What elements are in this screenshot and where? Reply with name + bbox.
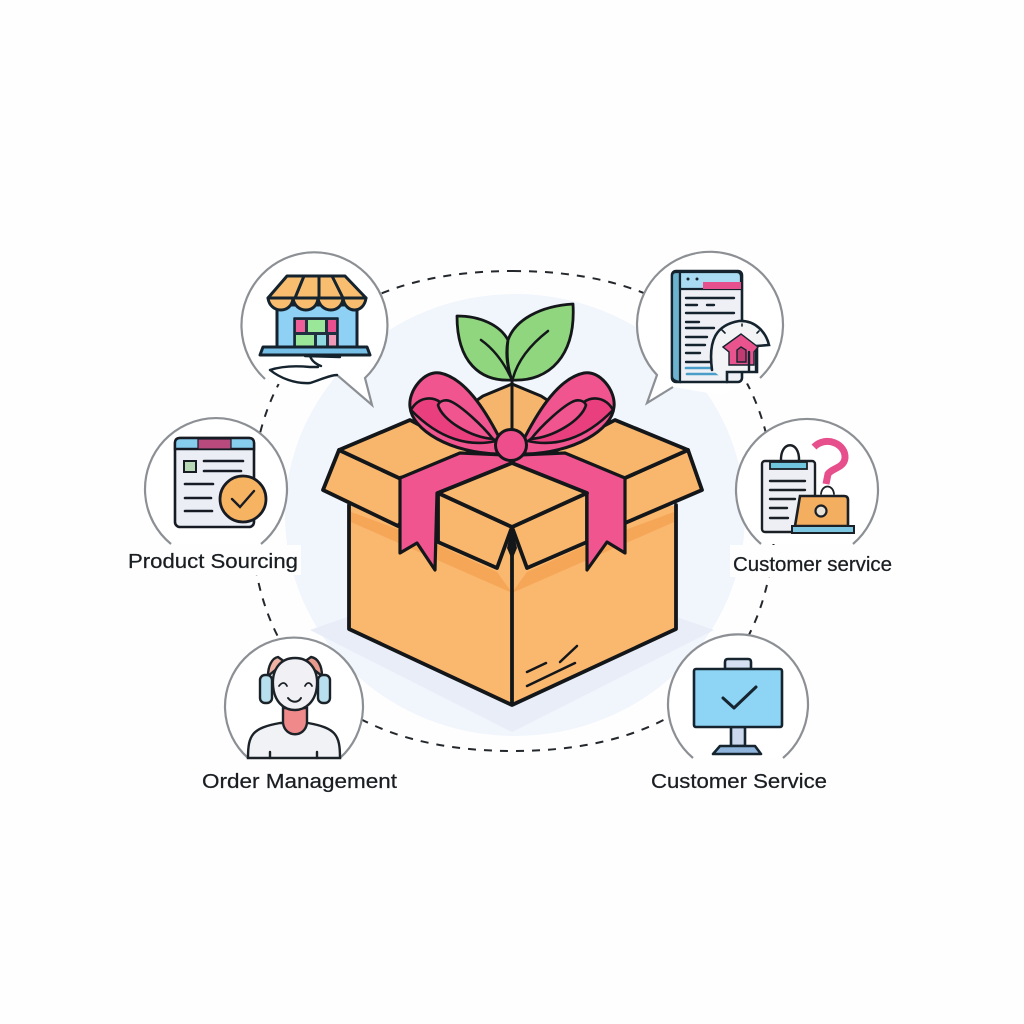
head — [273, 658, 317, 710]
central gift box — [323, 304, 702, 705]
window panes — [296, 320, 336, 346]
label mask right — [730, 545, 895, 577]
clipboard handle — [781, 445, 799, 461]
loop inner — [411, 398, 496, 443]
document body — [175, 438, 254, 527]
check mark — [232, 491, 254, 507]
bubble fill and stroke — [145, 418, 287, 544]
screen — [694, 669, 782, 727]
text lines — [686, 298, 734, 362]
icon: document — [672, 271, 769, 382]
check badge — [220, 476, 266, 522]
earphone right — [318, 675, 330, 703]
bubble: customer service clipboard — [733, 419, 892, 576]
top tab — [725, 659, 751, 669]
awning top — [268, 276, 366, 298]
header dots — [686, 278, 690, 280]
loop slit — [438, 400, 493, 439]
page — [672, 271, 742, 382]
thumbnail — [184, 461, 196, 472]
center seam tip — [507, 527, 517, 560]
base shelf — [260, 347, 370, 355]
icon: monitor with check — [694, 659, 782, 754]
left open flap — [323, 450, 420, 526]
front right flap — [512, 493, 587, 568]
loop outer — [525, 373, 614, 454]
smile — [288, 698, 301, 702]
stand — [731, 727, 745, 746]
text lines — [185, 461, 243, 511]
icon: clipboard and laptop — [762, 441, 854, 533]
lock handle — [821, 486, 834, 494]
legs — [749, 352, 756, 371]
arm lines — [270, 752, 317, 758]
bubble fill and stroke — [668, 634, 808, 758]
blue rows — [686, 368, 718, 374]
gauge arch — [711, 321, 769, 382]
bubble: document with house — [637, 252, 783, 403]
right leaf — [507, 304, 573, 380]
stand base — [713, 746, 761, 754]
stem — [510, 380, 514, 432]
box ground shadow — [310, 560, 714, 732]
right open flap — [600, 450, 702, 523]
gauge ticks — [722, 324, 759, 333]
emblem — [816, 506, 826, 516]
laptop base — [792, 526, 854, 533]
house door — [737, 347, 746, 362]
house roof — [723, 334, 758, 365]
question mark — [814, 441, 845, 484]
box edges — [349, 505, 676, 705]
header — [175, 438, 254, 449]
neck — [283, 708, 307, 734]
ribbon left tail — [400, 453, 512, 570]
clipboard lines — [770, 481, 805, 518]
right top flap — [534, 420, 688, 478]
hair left — [268, 657, 285, 676]
box left face — [349, 505, 512, 705]
hair right — [304, 657, 322, 676]
header pink bar — [703, 282, 741, 289]
label mask left — [125, 545, 301, 575]
bubble fill and stroke — [736, 419, 878, 544]
check mark — [723, 687, 756, 708]
clip — [770, 462, 807, 469]
laptop body — [795, 496, 848, 526]
bubble stroke — [241, 252, 387, 405]
bubble stroke — [637, 252, 783, 403]
awning scallops — [268, 298, 366, 310]
bubble: customer service monitor — [651, 634, 827, 793]
building — [277, 305, 357, 348]
label: Order Management — [202, 770, 397, 793]
bubble fill — [637, 252, 783, 403]
inner flap shadows — [351, 512, 674, 592]
spine — [672, 272, 680, 382]
hand — [270, 356, 340, 383]
icon: checklist document — [175, 438, 266, 527]
label: Customer Service — [651, 770, 827, 793]
left top flap — [339, 420, 490, 478]
bubble fill and stroke — [225, 638, 363, 758]
ribbon right tail — [512, 453, 625, 570]
earphone left — [260, 675, 272, 703]
body — [248, 723, 340, 758]
bubble: product sourcing — [128, 418, 298, 573]
header tab — [198, 439, 231, 449]
bow left loop — [410, 373, 499, 454]
loop inner — [528, 398, 613, 443]
shipping label lines — [527, 646, 577, 686]
bubble: order management — [202, 638, 397, 793]
leaf veins — [481, 331, 548, 378]
label: Product Sourcing — [128, 550, 298, 573]
header — [680, 272, 741, 289]
clipboard — [762, 461, 815, 532]
center top diamond — [438, 463, 587, 527]
eyes — [279, 683, 312, 686]
awning stripes — [295, 276, 343, 298]
dashed connecting ring — [251, 271, 775, 751]
bow right loop — [525, 373, 614, 454]
bubble fill — [241, 252, 387, 405]
box right face — [512, 505, 676, 705]
pale background circle — [285, 294, 745, 736]
front left flap — [438, 493, 512, 568]
loop slit — [531, 400, 586, 439]
bubble: store — [241, 252, 387, 405]
loop outer — [410, 373, 499, 454]
bow knot — [496, 430, 526, 460]
icon: person with headset — [248, 657, 340, 758]
left leaf — [457, 316, 512, 380]
back flap — [470, 384, 555, 445]
window — [294, 318, 338, 347]
label: Customer service — [733, 553, 892, 576]
icon: store — [260, 276, 370, 383]
